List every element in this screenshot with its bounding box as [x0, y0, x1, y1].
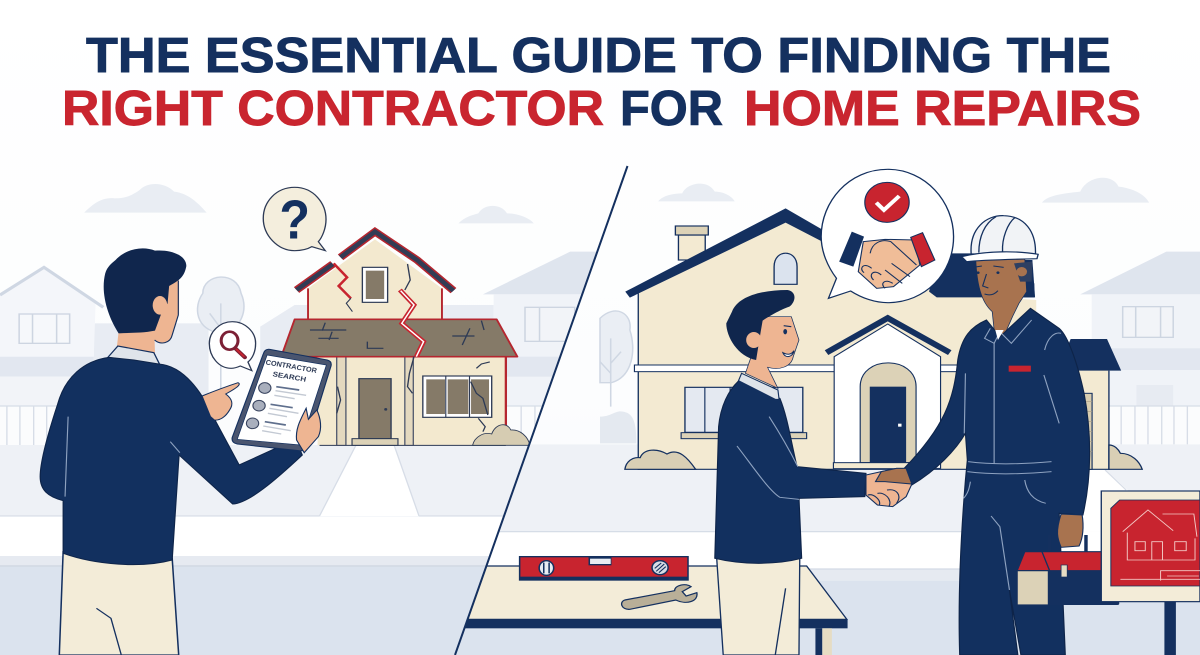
blueprint sign — [1101, 491, 1200, 655]
man searching on tablet — [40, 248, 331, 655]
title: HOME REPAIRS — [744, 82, 1141, 136]
work table — [447, 566, 848, 655]
left background neighbourhood — [0, 184, 600, 655]
handshake icon — [839, 232, 935, 288]
wrench — [622, 585, 697, 609]
sweater — [40, 357, 302, 565]
toolbox — [1017, 535, 1119, 605]
hard hat — [962, 216, 1038, 262]
divider line — [455, 166, 628, 655]
panel: left scene, searching with a damaged house — [0, 184, 600, 655]
homeowner shaking hands — [715, 290, 866, 655]
hand holding tablet — [296, 408, 321, 453]
head and neck — [104, 248, 186, 353]
damaged house — [281, 232, 530, 445]
title: RIGHT CONTRACTOR — [62, 82, 604, 136]
red check badge — [865, 182, 909, 222]
tablet: contractor search: CONTRACTOR — [265, 358, 318, 375]
tablet: contractor search: SEARCH — [272, 370, 307, 384]
title: THE ESSENTIAL GUIDE TO FINDING THE — [86, 29, 1111, 83]
spirit level — [520, 557, 688, 580]
contractor hair and face — [973, 258, 1035, 337]
finished house — [625, 208, 1142, 469]
roof and wall cracks — [310, 263, 490, 432]
speech bubble: magnifier — [209, 322, 256, 371]
pointing hand — [202, 383, 239, 420]
speech bubble: approved handshake — [821, 169, 954, 303]
head — [726, 290, 799, 388]
contractor hand on toolbox — [1057, 514, 1083, 547]
trousers — [59, 552, 179, 655]
tablet: contractor search — [232, 349, 331, 451]
shirt collar — [739, 373, 779, 399]
shirt collar — [108, 346, 160, 365]
speech bubble: question mark — [263, 187, 326, 251]
title: FOR — [620, 82, 723, 136]
panel: right scene, handshake with the contractor — [447, 178, 1200, 655]
contractor — [904, 216, 1090, 655]
sweater — [715, 380, 866, 563]
coveralls — [904, 308, 1090, 655]
right background neighbourhood — [447, 178, 1200, 655]
handshake between the two men — [866, 468, 912, 507]
trousers — [717, 558, 800, 655]
speech bubble: question mark: ? — [279, 189, 310, 251]
title — [62, 29, 1141, 136]
